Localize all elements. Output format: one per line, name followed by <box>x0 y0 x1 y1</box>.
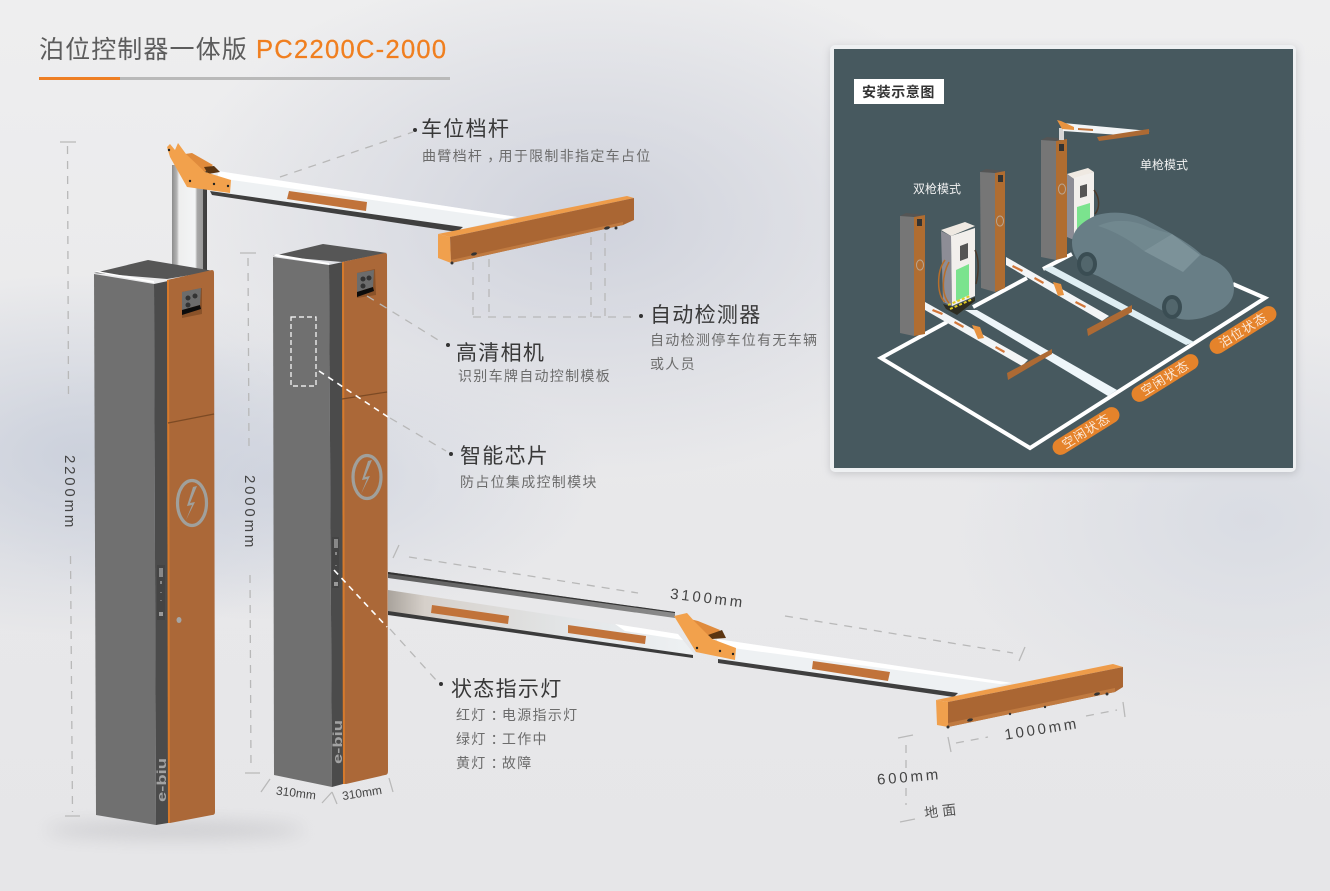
dimension: 310mm <box>261 778 393 804</box>
status pills <box>1050 303 1279 458</box>
dimension: 2200mm: 2200mm <box>61 455 78 530</box>
indicator strip <box>332 537 339 588</box>
pole: rear <box>1041 137 1067 260</box>
callout: barrier arm <box>280 118 652 177</box>
dimension: 2000mm: 2000mm <box>241 475 258 550</box>
callout: camera <box>367 296 611 384</box>
barrier arm lowered <box>388 572 1123 728</box>
end bar <box>438 196 634 264</box>
callout: auto detector: 自动检测器 <box>650 304 762 327</box>
end bar <box>936 664 1123 728</box>
lowered arm: right <box>1006 257 1132 336</box>
camera <box>182 288 202 318</box>
callout: camera: 识别车牌自动控制模板 <box>458 368 611 384</box>
mode labels: 双枪模式 <box>913 181 961 196</box>
brand: e-biu <box>155 758 169 802</box>
panel: installation diagram <box>830 45 1297 474</box>
barrier arm raised <box>167 143 634 271</box>
indicator strip <box>157 565 165 620</box>
title: 泊位控制器一体版 <box>39 36 248 64</box>
camera <box>357 269 376 298</box>
dimension: 600mm: 600mm <box>876 766 942 789</box>
panel frame <box>830 45 1296 472</box>
title <box>39 36 450 80</box>
callout: auto detector: 自动检测停车位有无车辆 <box>650 332 818 348</box>
status pills: 泊位状态 <box>1216 309 1270 351</box>
status pills: 空闲状态 <box>1060 411 1113 452</box>
column: 2000mm <box>273 244 388 787</box>
callout: status lights: 红灯 ：电源指示灯 <box>456 707 578 723</box>
pole: left <box>900 213 925 336</box>
callout: status lights <box>334 570 578 771</box>
brand: e-biu <box>331 720 345 764</box>
panel shadow <box>830 47 1297 474</box>
dimension: 600mm <box>876 735 942 822</box>
panel label: 安装示意图 <box>862 84 935 100</box>
callout: status lights: 绿灯 ：工作中 <box>456 731 548 747</box>
raised arm beam <box>210 171 517 229</box>
knuckle <box>167 143 231 193</box>
dimension: 1000mm <box>948 702 1125 752</box>
parking lot lines <box>881 254 1265 448</box>
dimension: 3100mm <box>393 545 1025 661</box>
callout: auto detector: 或人员 <box>650 356 696 372</box>
lowered arm: left <box>925 302 1052 380</box>
lower beam first section <box>388 590 695 655</box>
ground label: 地面 <box>923 801 961 821</box>
logo <box>353 456 381 498</box>
dimension: 310mm: 310mm <box>341 783 383 803</box>
title: PC2200C-2000 <box>256 36 447 64</box>
ground shadow <box>45 822 305 838</box>
callout: chip <box>319 371 598 490</box>
charger: dual gun <box>939 222 978 315</box>
column top <box>94 260 214 279</box>
grey face <box>94 274 156 825</box>
dimension: 2200mm <box>60 142 80 816</box>
logo <box>178 480 206 526</box>
panel: installation diagram: 单枪模式 <box>1140 157 1188 172</box>
labels <box>431 605 509 624</box>
upright post <box>172 165 207 271</box>
small raised arm <box>1057 120 1150 141</box>
callout: status lights: 状态指示灯 <box>451 678 562 701</box>
dimension: 310mm: 310mm <box>275 784 317 802</box>
callout: chip: 智能芯片 <box>460 445 549 468</box>
dimension: 2000mm <box>240 253 260 773</box>
car <box>1072 213 1234 320</box>
callout: auto detector <box>473 233 818 372</box>
dimension: 3100mm: 3100mm <box>669 586 746 612</box>
upper rail <box>388 572 675 618</box>
pole: middle <box>980 169 1005 292</box>
callout: barrier arm: 曲臂档杆 ，用于限制非指定车占位 <box>422 148 652 164</box>
callout: chip: 防占位集成控制模块 <box>460 474 598 490</box>
beam second section <box>717 639 1012 694</box>
callout: camera: 高清相机 <box>456 342 545 365</box>
knuckle <box>674 613 736 660</box>
column: 2200mm <box>94 260 215 825</box>
dimension: 1000mm: 1000mm <box>1003 715 1080 744</box>
chip outline <box>291 317 316 386</box>
dark strip <box>154 281 168 825</box>
orange label <box>287 191 367 211</box>
orange door <box>167 270 215 823</box>
charger: single gun <box>1067 168 1099 240</box>
status pills: 空闲状态 <box>1139 358 1192 399</box>
panel label <box>854 79 944 104</box>
callout: status lights: 黄灯 ：故障 <box>456 755 533 771</box>
callout: barrier arm: 车位档杆 <box>421 118 510 141</box>
